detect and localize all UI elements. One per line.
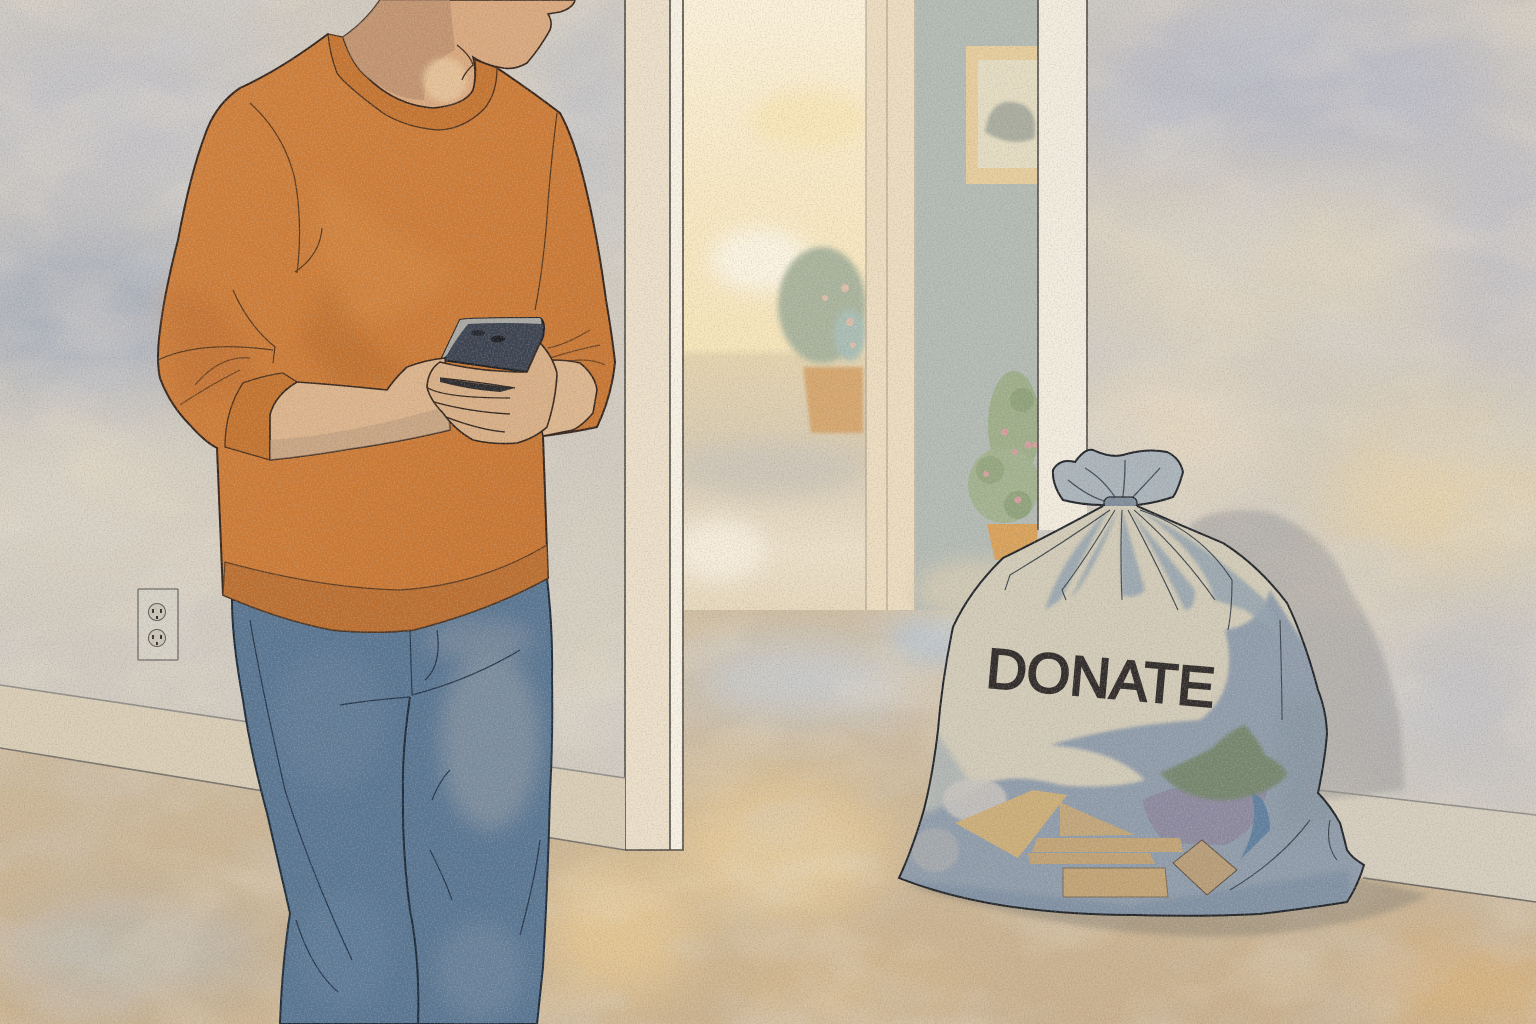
potted plant near <box>968 371 1040 560</box>
smartphone <box>425 318 544 414</box>
jeans <box>232 578 552 1024</box>
doorway opening with view outside <box>675 0 870 610</box>
electrical outlet <box>138 589 178 660</box>
bag label text: DONATE <box>984 636 1218 719</box>
bag top knot <box>1053 450 1183 509</box>
potted plant far <box>778 247 866 433</box>
bag contents <box>911 725 1287 897</box>
sweater <box>158 34 615 632</box>
left sleeve cuff <box>225 373 297 460</box>
interior room wall and framed picture <box>866 0 1038 620</box>
donate bag <box>890 450 1370 925</box>
collar <box>328 34 497 130</box>
door frame right <box>1038 0 1087 530</box>
sweater hem band <box>223 545 548 632</box>
neck and chin <box>343 0 575 108</box>
floor <box>0 610 1536 1024</box>
bag shadow on wall <box>1190 510 1405 800</box>
baseboards <box>0 685 1536 902</box>
floor shadow under bag <box>905 878 1430 936</box>
forearms and hands <box>270 343 597 460</box>
door frame left <box>625 0 684 850</box>
bag outline <box>899 506 1364 916</box>
bag body <box>899 506 1364 916</box>
